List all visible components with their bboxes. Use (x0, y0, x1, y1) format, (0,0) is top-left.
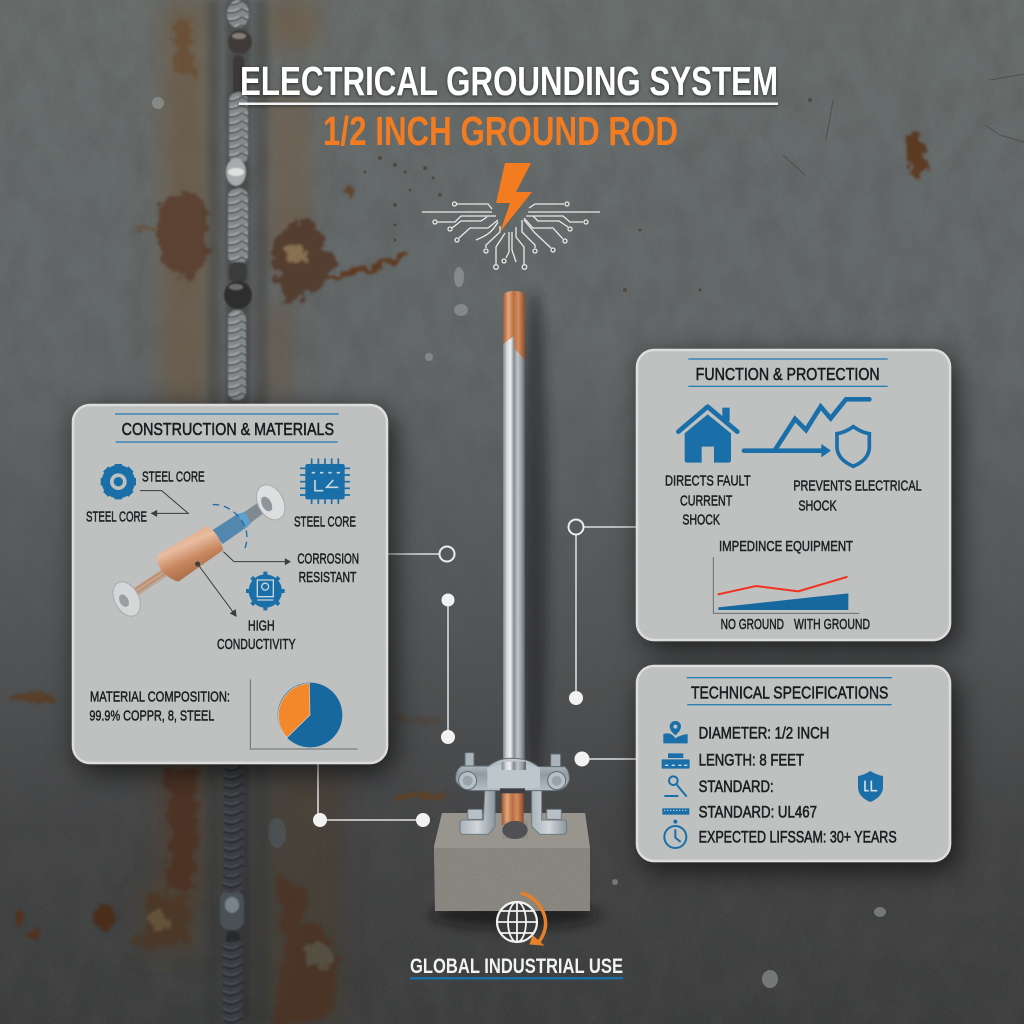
icon: clock (664, 821, 686, 848)
diagram: rod cross-section (107, 480, 291, 621)
text: corrosion resistant: RESISTANT (299, 569, 356, 586)
icon: gear (101, 464, 136, 499)
clamp saddle and bolts (456, 753, 569, 793)
heading: function and protection: FUNCTION & PROTECTION (696, 364, 880, 384)
icon: length gauge (662, 753, 690, 769)
concrete block (434, 813, 590, 911)
ground rod assembly on concrete block (430, 290, 600, 929)
weld seam grooves (208, 0, 220, 1024)
text: prevents electrical shock: PREVENTS ELECTRICAL (793, 477, 922, 494)
text: directs fault current shock: DIRECTS FAULT (665, 473, 751, 490)
gravel collar (502, 821, 528, 839)
connector lines and nodes (313, 520, 637, 827)
heading: construction and materials: CONSTRUCTION & MATERIALS (122, 419, 334, 439)
icon: diameter marker (663, 721, 688, 743)
text: specification list: LENGTH: 8 FEET (699, 751, 804, 769)
text: prevents electrical shock (793, 477, 922, 514)
text: material composition (89, 688, 230, 725)
icon: chip (300, 458, 350, 504)
text: high conductivity: HIGH (248, 618, 275, 635)
text: prevents electrical shock: SHOCK (798, 497, 837, 514)
icon: gear chip (246, 572, 285, 610)
icon: globe with orange arrow (497, 893, 546, 945)
text: steel core labels: STEEL CORE (86, 508, 147, 525)
heading: technical specifications: TECHNICAL SPECIFICATIONS (691, 682, 888, 702)
panel: technical specifications (637, 666, 950, 861)
subtitle: 1/2 INCH GROUND ROD (323, 108, 678, 154)
text: specification list: DIAMETER: 1/2 INCH (699, 725, 829, 743)
icon: UL shield (858, 771, 883, 802)
silver rod (503, 291, 525, 765)
icon: lightning bolt with circuit traces (422, 163, 600, 269)
text: specification list: STANDARD: (699, 778, 774, 796)
icon: house (678, 407, 737, 463)
chart: impedance with and without ground (713, 538, 870, 633)
text: specification list: STANDARD: UL467 (699, 804, 817, 822)
copper lower section (502, 792, 524, 825)
text: steel core labels: STEEL CORE (294, 514, 356, 531)
chart: impedance with and without ground: WITH GROUND (794, 616, 870, 633)
icon: standard probe (664, 776, 687, 797)
text: specification list: EXPECTED LIFSSAM: 30+ YEARS (699, 828, 897, 846)
footer label: global industrial use: GLOBAL INDUSTRIAL USE (410, 955, 623, 978)
panel: function and protection (637, 350, 950, 640)
panel: construction and materials (73, 405, 387, 763)
title: ELECTRICAL GROUNDING SYSTEM (240, 58, 778, 104)
text: high conductivity (217, 618, 296, 653)
leader arrows (140, 491, 290, 616)
text: directs fault current shock: SHOCK (682, 511, 720, 528)
arrow and surge line (744, 399, 869, 457)
text: directs fault current shock (665, 473, 751, 528)
text: corrosion resistant (297, 551, 359, 586)
icon: shield (837, 427, 869, 466)
weld beads (220, 0, 252, 1024)
pie chart: material composition (250, 679, 358, 749)
text: directs fault current shock: CURRENT (680, 493, 732, 510)
text: material composition: MATERIAL COMPOSITION: (90, 688, 230, 705)
chart: impedance with and without ground: NO GROUND (721, 616, 784, 633)
clamp legs and feet (460, 788, 567, 834)
text: steel core labels: STEEL CORE (142, 468, 205, 485)
text: material composition: 99.9% COPPR, 8, STEEL (89, 708, 214, 725)
text: high conductivity: CONDUCTIVITY (217, 636, 296, 653)
icon: ruler (662, 808, 689, 815)
text: steel core labels (86, 468, 356, 531)
chart: impedance with and without ground: IMPEDINCE EQUIPMENT (719, 538, 853, 555)
text: specification list (699, 725, 897, 846)
text: corrosion resistant: CORROSION (297, 551, 359, 568)
